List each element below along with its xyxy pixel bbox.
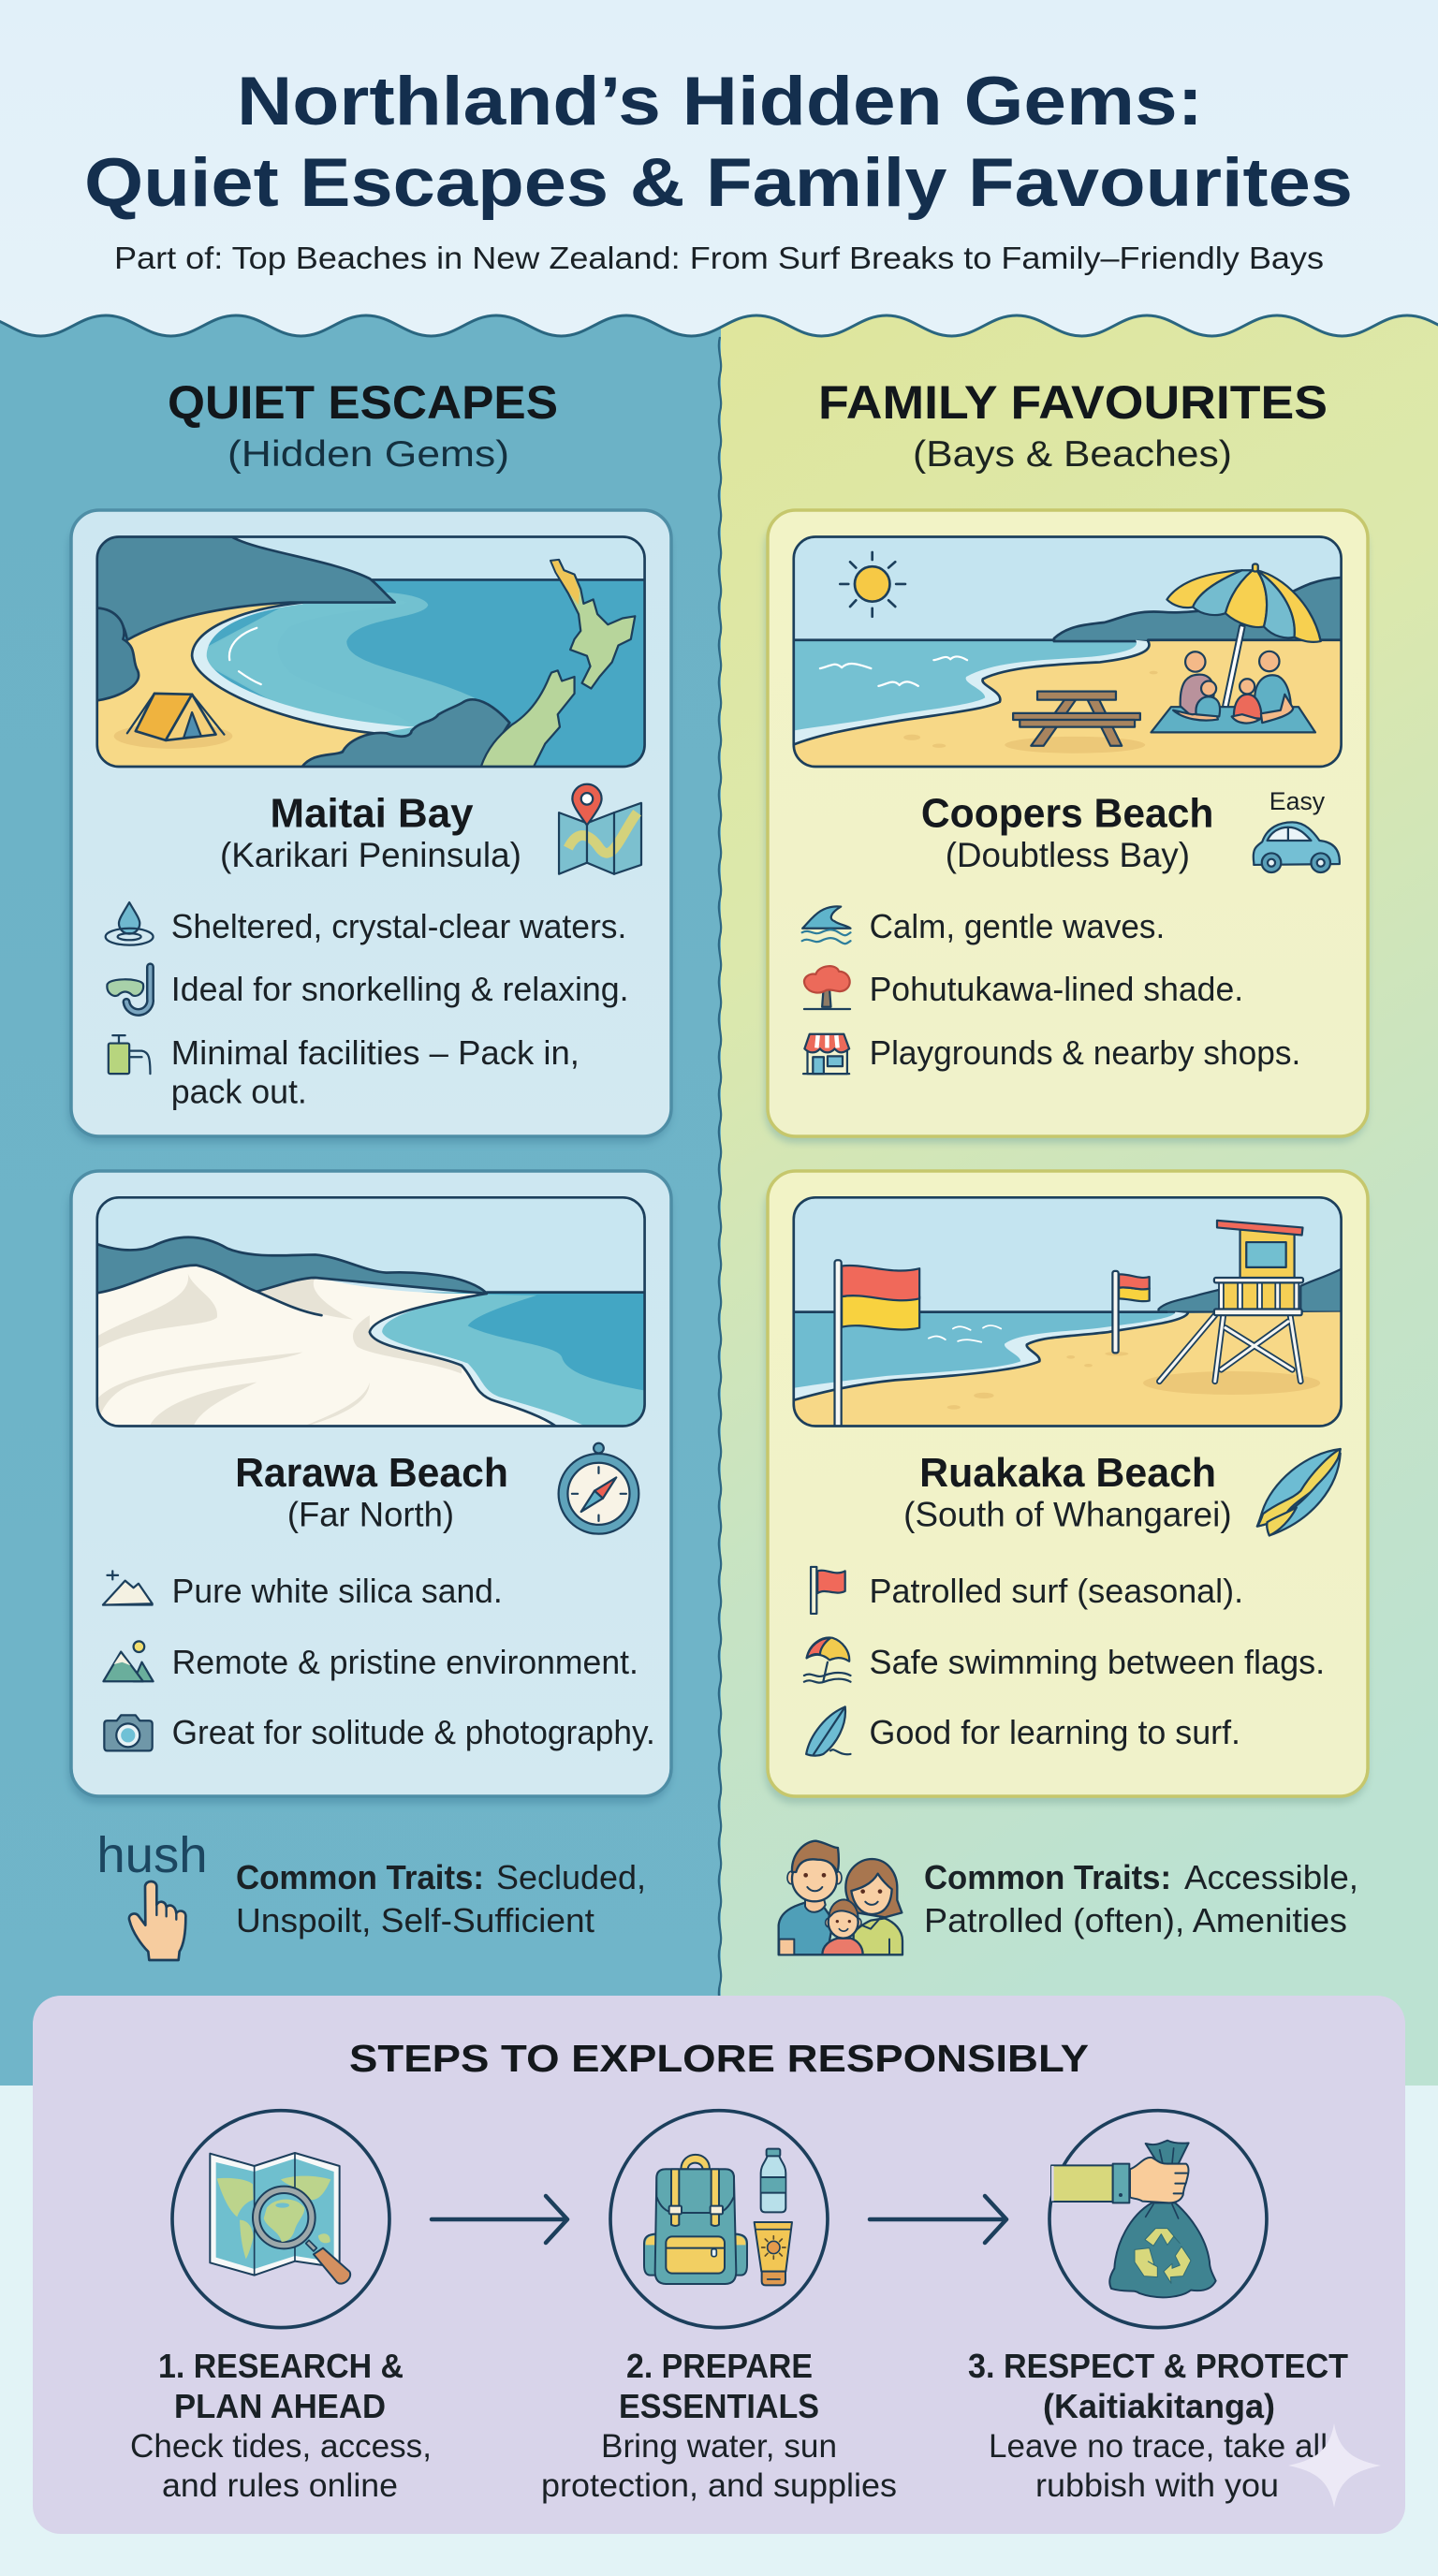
beach name: Maitai Bay (271, 791, 474, 837)
step 3 text: rubbish with you (1035, 2467, 1279, 2504)
bullet text: Minimal facilities – Pack in, (171, 1034, 580, 1072)
bullet text: Sheltered, crystal-clear waters. (171, 908, 626, 945)
bullet text: Remote & pristine environment. (172, 1644, 638, 1681)
step 1 text: and rules online (162, 2467, 398, 2504)
icon: surfboard (806, 1706, 850, 1756)
arrow (870, 2196, 1006, 2243)
step 1 icon: map and magnifier (172, 2111, 389, 2328)
bullet text: Pure white silica sand. (172, 1573, 503, 1610)
icon: white sand dunes (103, 1571, 153, 1605)
text (924, 1858, 1358, 1939)
illustration: Ruakaka Beach scene (791, 1197, 1344, 1429)
location: (Far North) (287, 1496, 454, 1534)
illustration: Rarawa Beach scene (94, 1197, 645, 1428)
bullet text: Patrolled surf (seasonal). (870, 1573, 1243, 1610)
beach name: Rarawa Beach (235, 1450, 508, 1496)
panel background: family favourites (721, 309, 1438, 2086)
beach name: Ruakaka Beach (919, 1450, 1216, 1496)
location: (Doubtless Bay) (946, 836, 1190, 874)
illustration: Coopers Beach scene (791, 536, 1344, 768)
icon: camera (104, 1715, 153, 1750)
step 3 icon: hand holding recycling bag (1049, 2111, 1267, 2328)
bullet text: Calm, gentle waves. (870, 908, 1165, 945)
bullet text: Playgrounds & nearby shops. (870, 1034, 1300, 1072)
beach name: Coopers Beach (921, 791, 1213, 837)
icon: car (1254, 822, 1340, 872)
icon: hush hand (96, 1828, 208, 1960)
panel: Rarawa Beach card (68, 1171, 671, 1804)
bullet text: Ideal for snorkelling & relaxing. (171, 971, 629, 1008)
common traits: family favourites (779, 1841, 1358, 1954)
step 1 text: 1. RESEARCH & (158, 2347, 404, 2385)
step 3 text: 3. RESPECT & PROTECT (968, 2347, 1348, 2385)
heading: quiet escapes: (Hidden Gems) (227, 434, 509, 475)
icon: compass (559, 1443, 638, 1534)
heading: quiet escapes: QUIET ESCAPES (168, 376, 558, 429)
subtitle: Part of: Top Beaches in New Zealand: From Surf Breaks to Family–Friendly Bays (114, 241, 1324, 275)
icon: snorkel (107, 967, 151, 1012)
panel: Ruakaka Beach card (765, 1171, 1368, 1804)
icon: shop (803, 1034, 849, 1074)
heading: family favourites (818, 376, 1328, 475)
common traits: quiet escapes (96, 1828, 646, 1960)
icon: water tap (109, 1035, 150, 1074)
bullet text: Great for solitude & photography. (172, 1714, 655, 1751)
panel: Maitai Bay card (68, 510, 671, 1143)
panel: steps to explore responsibly (33, 1996, 1405, 2534)
bullet text: Pohutukawa-lined shade. (870, 971, 1243, 1008)
sparkle mark (1288, 2423, 1381, 2508)
location: (South of Whangarei) (903, 1496, 1232, 1534)
text: Patrolled (often), Amenities (924, 1901, 1347, 1939)
step 2 text: 2. PREPARE (626, 2347, 813, 2385)
icon: wave (802, 906, 850, 944)
step 1 text: Check tides, access, (130, 2428, 432, 2465)
step 2 text: Bring water, sun (601, 2428, 837, 2465)
text: Accessible, (1184, 1858, 1358, 1896)
text (236, 1858, 646, 1939)
arrow (432, 2196, 567, 2243)
icon: flag (811, 1567, 845, 1614)
title: Quiet Escapes & Family Favourites (84, 145, 1353, 221)
bullet text: Safe swimming between flags. (870, 1644, 1325, 1681)
header wave band (0, 0, 1438, 336)
icon: surfboards (1257, 1449, 1341, 1535)
step 2 text: ESSENTIALS (619, 2387, 819, 2425)
icon: hush hand: hush (96, 1828, 208, 1883)
icon: map with pin (559, 784, 641, 874)
title: Northland’s Hidden Gems: (237, 64, 1203, 139)
icon: water drop (106, 902, 154, 945)
bullet text (171, 1034, 580, 1110)
text: Common Traits: (236, 1858, 484, 1896)
heading: family favourites: (Bays & Beaches) (913, 434, 1232, 475)
panel background: quiet escapes (0, 309, 721, 2086)
illustration: Maitai Bay scene (94, 534, 645, 768)
column divider (719, 337, 721, 2022)
step 3 text: Leave no trace, take all (989, 2428, 1328, 2465)
text: Unspoilt, Self-Sufficient (236, 1901, 594, 1939)
text: Secluded, (496, 1858, 646, 1896)
icon: umbrella on waves (804, 1638, 850, 1683)
title (84, 64, 1353, 221)
heading: family favourites: FAMILY FAVOURITES (818, 376, 1328, 429)
panel: Coopers Beach card (765, 510, 1368, 1143)
step 3 text (968, 2347, 1348, 2504)
step 3 text: (Kaitiakitanga) (1043, 2387, 1275, 2425)
label: easy access: Easy (1269, 787, 1326, 815)
bullet text: Good for learning to surf. (870, 1714, 1240, 1751)
location: (Karikari Peninsula) (220, 836, 521, 874)
step 2 text (541, 2347, 897, 2504)
step 1 text (130, 2347, 432, 2504)
step 1 text: PLAN AHEAD (174, 2387, 386, 2425)
heading: quiet escapes (168, 376, 558, 475)
icon: family (779, 1841, 902, 1954)
icon: mountains (103, 1641, 154, 1681)
heading: STEPS TO EXPLORE RESPONSIBLY (349, 2037, 1089, 2080)
icon: pohutukawa tree (804, 966, 850, 1009)
bullet text: pack out. (171, 1073, 307, 1110)
text: Common Traits: (924, 1858, 1171, 1896)
step 2 icon: backpack, bottle, sunscreen (610, 2111, 828, 2328)
step 2 text: protection, and supplies (541, 2467, 897, 2504)
